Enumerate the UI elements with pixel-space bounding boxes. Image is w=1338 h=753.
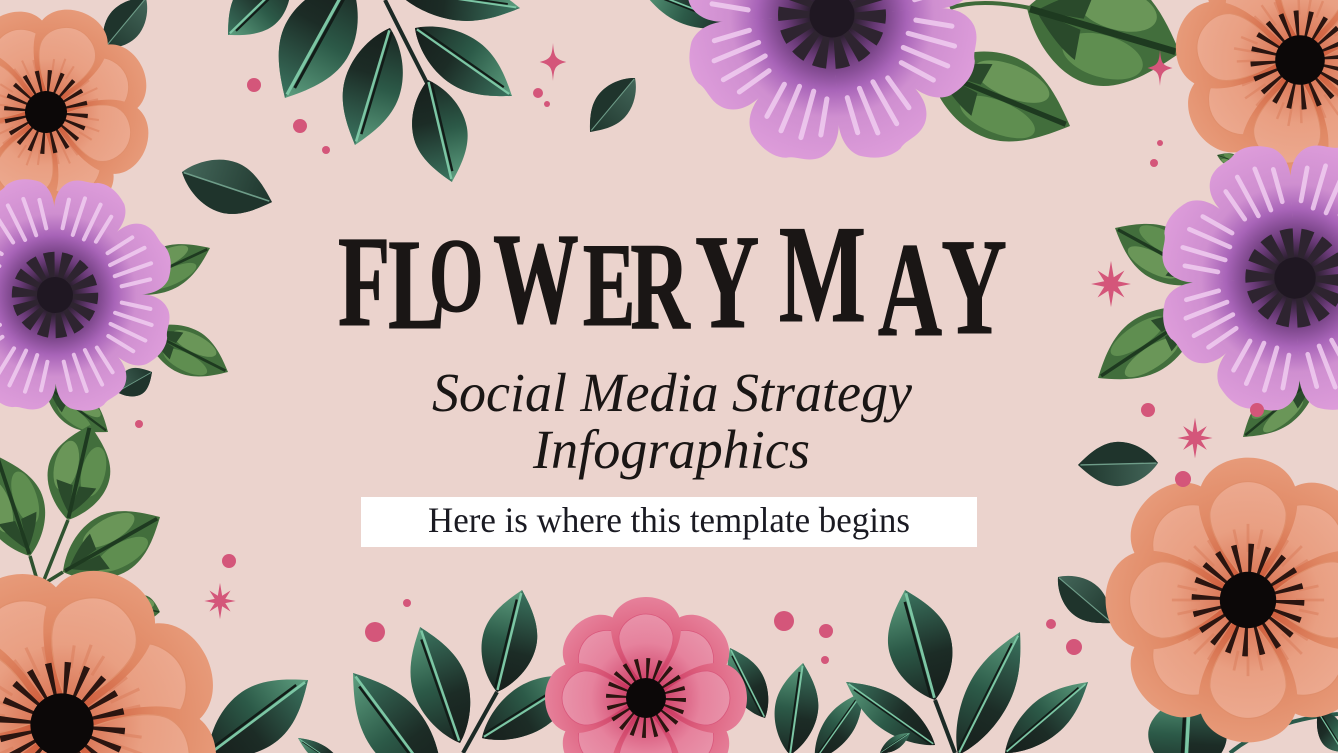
flower: pink bottom [545, 597, 747, 753]
flower: purple top [640, 0, 1024, 207]
leaf cluster: right [1082, 149, 1331, 452]
leaf cluster: top right green [634, 0, 1196, 166]
leaf cluster: bottom left centre [190, 584, 594, 753]
leaf cluster: top centre [211, 0, 526, 188]
flower: orange top left [0, 0, 182, 248]
subtitle: Social Media Strategy [432, 362, 913, 423]
flower: purple right [1117, 100, 1338, 456]
title: L [388, 212, 445, 356]
title: O [429, 218, 483, 335]
sparkles [204, 43, 1213, 619]
title: M [779, 196, 866, 352]
flower: orange top right [1155, 0, 1338, 205]
title: W [493, 206, 579, 350]
subtitle: Infographics [532, 419, 810, 480]
flower: orange bottom right [1106, 458, 1338, 742]
title: Y [941, 211, 1007, 364]
leaf cluster: left [0, 228, 238, 625]
title: Y [695, 207, 759, 357]
leaf cluster: bottom right centre [715, 582, 1100, 753]
pink dots [135, 78, 1264, 664]
title: A [878, 215, 942, 365]
subtitle [432, 362, 913, 480]
title: F [338, 209, 390, 353]
title [338, 196, 1007, 365]
leaf cluster: bottom right corner [1146, 688, 1338, 753]
flower: purple left [0, 137, 213, 453]
title: E [583, 218, 636, 351]
tagline box [361, 497, 977, 547]
title: R [630, 217, 691, 355]
flower: orange bottom left [0, 520, 267, 753]
tagline box: Here is where this template begins [428, 500, 910, 540]
loose dark leaves [89, 0, 1159, 637]
